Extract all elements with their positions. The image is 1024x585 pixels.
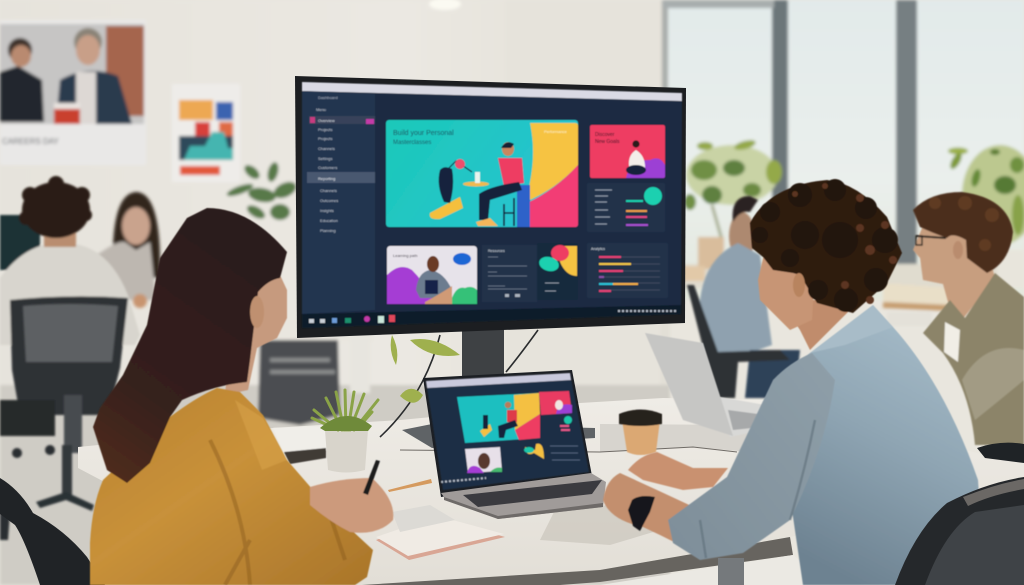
watch [628,496,655,531]
ear [953,241,963,259]
blob card [537,243,578,300]
sidebar: Overview [318,118,335,123]
back table leg [350,338,370,393]
hair [913,192,1013,273]
ear [793,273,805,297]
sidebar: Reporting [318,176,335,181]
sidebar: Projects [318,136,332,141]
sleeve highlight [235,400,287,470]
chair right [895,477,1024,585]
laptop [423,370,606,519]
wall [0,0,670,400]
sidebar: Menu [316,107,326,112]
sweater [90,388,373,585]
lid [423,370,592,497]
table shadow [540,505,660,545]
closed laptop under monitor [402,424,595,448]
pink card: Discover [595,132,615,138]
poster: colour blocks [172,84,240,182]
man with curly hair [603,179,985,585]
bars card [587,243,668,298]
background man left [0,176,140,540]
olive jacket [923,273,1024,445]
sidebar: Dashboard [318,95,338,100]
lit jacket [962,348,1024,420]
shirt fold [700,420,815,558]
list card [587,183,665,232]
woman with dark hair [90,208,393,585]
laptop lower cards [465,416,580,473]
box and books left of monitor [273,426,327,464]
neck and face [913,205,995,320]
plant on wall side [225,161,299,221]
monitor [295,76,686,338]
lower forearm and hand [603,473,700,550]
wood desk [683,266,705,281]
bars card: Analytics [591,247,605,251]
ear [250,296,264,328]
table top [78,398,1024,585]
shirt back [773,305,985,585]
poster: people: CAREERS DAY [2,137,59,146]
sweater folds [210,440,345,585]
title bar [302,82,682,101]
settings card [482,245,537,302]
base [441,473,606,519]
sidebar [302,91,375,314]
white video card: Learning path [393,253,417,258]
sidebar: Settings [318,156,332,161]
table leg [718,558,744,585]
neck [780,300,860,350]
pink card [590,125,665,178]
sidebar: Projects [318,127,332,132]
man in background right [687,196,800,398]
curly hair [750,179,902,313]
hero illustration [386,120,578,227]
keyboard [463,480,602,507]
pencil [388,479,432,492]
t-shirt [944,322,960,362]
desk [78,398,1024,585]
face [758,240,815,330]
sidebar: Customers [318,165,337,170]
hair [93,208,287,483]
glasses [916,236,946,238]
taskbar [302,305,681,328]
leaves [312,390,378,430]
screen background [302,82,682,328]
base edge [444,497,603,519]
laptop pink card [539,391,572,415]
sidebar: Planning [320,228,336,233]
hair curls [929,196,999,251]
phone on table [977,443,1024,463]
hero illustration: Build your Personal [393,130,454,137]
back silver laptop [645,333,765,437]
hero illustration: Performance [544,129,568,134]
shirt sleeve [668,353,835,560]
sidebar: Channels [320,188,337,193]
cables [380,330,538,437]
pink card: New Goals [595,139,620,145]
laptop taskbar [441,478,486,482]
white shirt [0,244,140,345]
bezel [295,76,686,338]
back chairs [258,340,340,425]
dark monitor [0,215,40,270]
face and neck [225,262,287,395]
potted plant [312,390,378,472]
upper hand [628,452,728,490]
neck [44,232,76,247]
office chair [0,296,128,540]
background woman [97,192,160,308]
small leaves [391,335,460,403]
coffee cup [619,410,662,460]
ceiling light [429,0,461,10]
windows [662,0,1024,300]
sidebar: Outcomes [320,198,338,203]
floor beyond table [600,555,830,585]
back chair left [0,478,105,585]
window plant [684,138,782,269]
man with glasses [913,192,1024,445]
pot [325,428,368,472]
monitor stand [380,328,538,437]
table front edge [362,537,793,585]
wall pillar [505,0,660,400]
hero illustration: Masterclasses [393,140,431,146]
laptop hero [457,393,540,443]
settings card: Resources [488,249,505,253]
back table [273,320,373,342]
sidebar: Insights [320,208,334,213]
back chair arms [270,360,335,372]
pen [363,460,380,495]
notebook [376,505,505,560]
side desk right [883,283,950,305]
hand and forearm [310,478,393,533]
sidebar: Education [320,218,338,223]
table seam [400,447,737,452]
floor [0,385,670,585]
sidebar: Channels [318,146,335,151]
plant right [948,145,1024,288]
poster: people [0,20,146,165]
shadow band [600,424,750,452]
collar [810,305,893,353]
white video card [387,246,477,304]
curly hair [22,182,90,238]
laptop screen [426,373,589,490]
